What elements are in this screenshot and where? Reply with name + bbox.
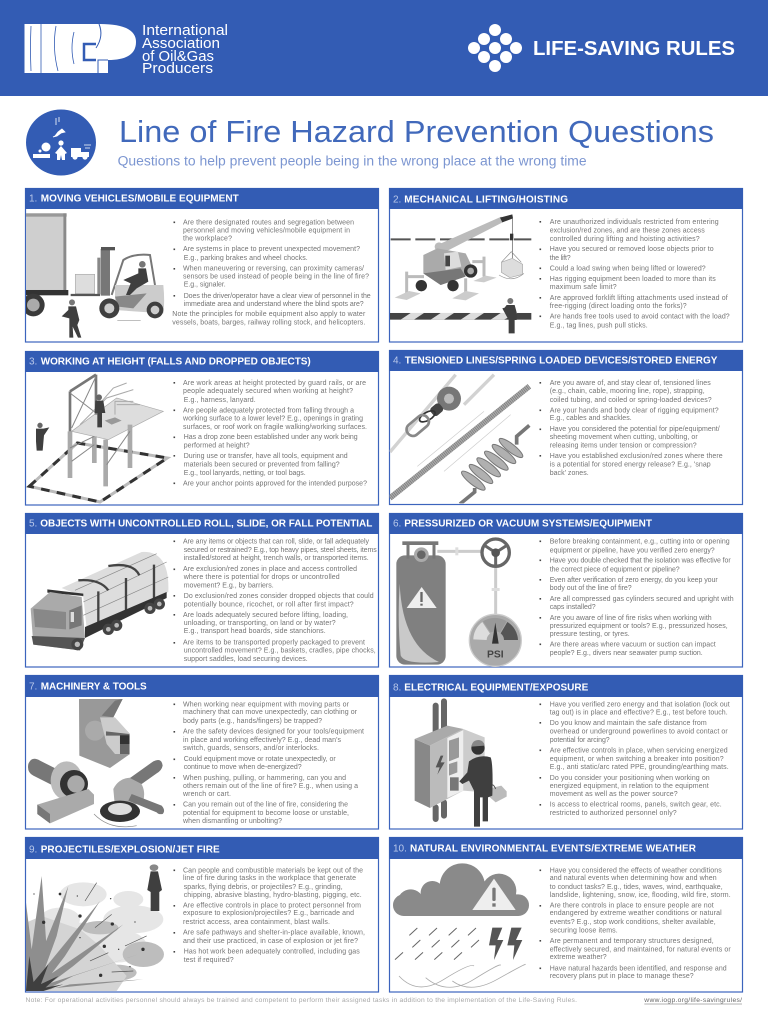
text 5: Do exclusion/red zones consider dropped objects that could: [184, 593, 374, 600]
heading 6: PRESSURIZED OR VACUUM SYSTEMS/EQUIPMENT: [404, 519, 652, 530]
text 3: Are work areas at height protected by guard rails, or are: [183, 380, 366, 387]
text 4: [540, 380, 723, 477]
text 6: [540, 538, 734, 657]
heading 7: 7.: [29, 682, 37, 693]
text 5: [174, 538, 377, 663]
panel 5: objects with uncontrolled roll: [25, 513, 379, 667]
text 8: Is access to electrical rooms, panels, switch gear, etc.: [550, 802, 722, 808]
text 2: Are approved forklift lifting attachments used instead of: [550, 295, 728, 302]
icon: life-saving rules dots: [468, 24, 522, 72]
text 7: machinery that can move unexpectedly, can clothing or: [183, 709, 358, 716]
text 4: (e.g., chain, cable, mooring line, rope), strapping,: [550, 388, 705, 395]
text 2: E.g., tag lines, push pull sticks.: [550, 322, 648, 330]
panel 7: machinery and tools: [25, 675, 379, 829]
text 5: Are exclusion/red zones in place and access controlled: [183, 566, 357, 573]
text 5: E.g., transport head boards, side stanchions.: [184, 628, 326, 635]
illustration: scaffold platform: [29, 375, 167, 502]
text 1: [172, 220, 371, 326]
text 2: controlled during lifting and hoisting activities?: [550, 236, 700, 243]
text 10: recovery plans put in place to manage these?: [550, 973, 694, 980]
text 1: When maneuvering or reversing, can proximity cameras/: [183, 266, 364, 272]
text 9: and their use practiced, in case of explosion or jet fire?: [183, 938, 358, 945]
heading 3: 3.: [29, 357, 37, 368]
text 1: Does the driver/operator have a clear view of personnel in the: [184, 293, 371, 300]
text 8: energized equipment, in relation to the equipment: [550, 783, 709, 790]
text 3: materials been secured or prevented from falling?: [184, 462, 340, 468]
text 3: [174, 380, 367, 488]
text 9: Can people and combustible materials be kept out of the: [183, 868, 363, 874]
text 7: wrench or cart.: [182, 791, 231, 798]
text 4: is a potential for stored energy release? E.g., 'snap: [550, 462, 711, 468]
logo: IOGP mark: [24, 24, 136, 73]
text 2: Are unauthorized individuals restricted from entering: [550, 219, 719, 226]
text 9: restrict access, area containment, blast walls.: [183, 919, 330, 926]
heading 2: 2.: [393, 195, 401, 206]
text 9: test if required?: [184, 957, 234, 964]
text 6: Even after verification of zero energy, do you keep your: [550, 577, 718, 584]
text 1: Note the principles for mobile equipment also apply to water: [172, 311, 366, 318]
text 3: performed at height?: [184, 442, 250, 450]
text 10: extreme weather?: [550, 954, 607, 961]
text 7: body parts (e.g., hands/fingers) be trapped?: [183, 718, 322, 725]
text 6: pressurized equipment or tools? E.g., pressurized hoses,: [550, 623, 728, 630]
text 5: Are any items or objects that can roll, slide, or fall adequately: [183, 538, 370, 546]
text 8: equipment, or when switching a breaker into position?: [550, 756, 724, 763]
text 7: [174, 702, 364, 825]
header band: [0, 0, 768, 96]
text 6: pressure testing, or tyres.: [550, 631, 630, 638]
panel 8: electrical equipment: [389, 675, 743, 829]
text 4: Are you aware of, and stay clear of, tensioned lines: [550, 380, 711, 387]
illustration: gas cylinder, valve, gauge: PSI: [487, 649, 504, 660]
text 7: Can you remain out of the line of fire, considering the: [183, 802, 348, 808]
illustration: log truck: [31, 552, 168, 650]
panel 2: mechanical lifting: [389, 188, 743, 342]
heading 4: 4.: [393, 356, 401, 367]
organisation name: [142, 22, 228, 77]
panel 3: working at height: [25, 351, 379, 505]
text 8: movement as well as the power source?: [550, 791, 678, 798]
text 9: line of fire during tasks in the workplace that generate: [183, 875, 356, 882]
text 1: E.g., signaler.: [184, 282, 226, 288]
heading 7: MACHINERY & TOOLS: [41, 682, 147, 693]
text 2: Has rigging equipment been loaded to more than its: [550, 276, 716, 283]
text 6: people? E.g., divers near seawater pump suction.: [550, 650, 703, 657]
text 2: [540, 219, 730, 330]
text 3: E.g., harness, lanyard.: [184, 397, 256, 404]
text 10: effectively secured, and maintained, for natural events or: [550, 946, 731, 954]
text 1: E.g., parking brakes and wheel chocks.: [184, 255, 308, 262]
text 8: Do you know and maintain the safe distance from: [550, 720, 707, 727]
illustration: crane: [390, 214, 531, 333]
text 10: Are there controls in place to ensure people are not: [550, 902, 714, 910]
text 7: potential for equipment to become loose or unstable,: [183, 810, 349, 817]
text 9: exposure to explosion/projectiles? E.g., barricade and: [183, 910, 354, 917]
text 6: equipment or pipeline, have you verified zero energy?: [550, 548, 715, 554]
text 2: free-rigging (direct loading onto the forks)?: [550, 303, 687, 310]
text 10: landslide, lightening, snow, ice, flooding, wild fire, storm.: [550, 892, 731, 899]
text 8: potential for arcing?: [550, 737, 610, 744]
heading 2: MECHANICAL LIFTING/HOISTING: [404, 195, 568, 206]
heading 1: 1.: [29, 194, 37, 205]
text 10: [540, 868, 731, 980]
heading 10: NATURAL ENVIRONMENTAL EVENTS/EXTREME WEATHER: [410, 844, 697, 855]
text 9: [174, 868, 365, 964]
heading 5: OBJECTS WITH UNCONTROLLED ROLL, SLIDE, OR FALL POTENTIAL: [40, 519, 372, 530]
text 9: Are safe pathways and shelter-in-place available, known,: [183, 930, 365, 936]
panel 6: pressurized systems: [389, 513, 743, 667]
text 10: endangered by extreme weather conditions or natural: [550, 910, 722, 917]
text 5: Are loads adequately secured before lifting, loading,: [183, 612, 348, 619]
text 2: exclusion/red zones, and are these zones access: [550, 228, 705, 234]
text 3: surfaces, or roof work on fragile walking/working surfaces.: [183, 424, 367, 431]
text 10: to conduct tasks? E.g., tides, waves, wind, earthquake,: [550, 884, 723, 891]
text 7: Are the safety devices designed for your tools/equipment: [183, 728, 364, 736]
text 10: Are permanent and temporary structures designed,: [550, 938, 714, 945]
text 3: Has a drop zone been established under any work being: [184, 434, 358, 441]
text 4: Have you considered the potential for pipe/equipment/: [550, 426, 720, 433]
text 9: sparks, flying debris, or projectiles? E.g., grinding,: [184, 884, 343, 891]
text 2: Are hands free tools used to avoid contact with the load?: [550, 314, 730, 320]
text 9: Has hot work been adequately controlled, including gas: [184, 948, 360, 956]
text 3: E.g., tool lanyards, netting, or tool bags.: [184, 470, 306, 477]
text 1: immediate area and understand where the blind spots are?: [184, 301, 364, 308]
illustration: machine, gear, grinder: [28, 699, 164, 827]
text 3: During use or transfer, have all tools, equipment and: [184, 453, 348, 460]
text 7: Could equipment move or rotate unexpectedly, or: [184, 756, 336, 763]
footer url: www.iogp.org/life-savingrules/: [643, 997, 742, 1004]
text 6: Are there areas where vacuum or suction can impact: [550, 642, 716, 648]
text 7: When pushing, pulling, or hammering, can you and: [183, 775, 346, 782]
heading 4: TENSIONED LINES/SPRING LOADED DEVICES/STORED ENERGY: [405, 356, 718, 367]
heading 6: 6.: [393, 519, 401, 530]
text 5: secured or restrained? E.g., top heavy pipes, steel sheets, items: [184, 547, 377, 554]
icon: line of fire circle: [26, 110, 96, 176]
text 7: When working near equipment with moving parts or: [183, 702, 350, 708]
text 8: restricted to authorized personnel only?: [550, 810, 677, 817]
text 5: installed/stored at height, trench walls, or transported items.: [184, 555, 369, 562]
text 1: vessels, boats, barges, railway rolling stock, and helicopters.: [172, 320, 365, 326]
text 7: in place and working effectively? E.g., dead man's: [183, 737, 342, 744]
heading 9: PROJECTILES/EXPLOSION/JET FIRE: [41, 845, 220, 856]
illustration: explosion: [26, 864, 164, 991]
text 4: releasing items under tension or compression?: [550, 442, 697, 450]
text 2: Could a load swing when being lifted or lowered?: [550, 266, 706, 272]
text 8: Do you consider your positioning when working on: [550, 775, 710, 782]
text 6: Have you double checked that the isolation was effective for: [550, 558, 731, 564]
text 6: Are all compressed gas cylinders secured and upright with: [550, 596, 734, 603]
text 5: uncontrolled movement? E.g., baskets, cradles, pipe chocks,: [184, 648, 376, 654]
text 6: body out of the line of fire?: [550, 585, 632, 592]
text 4: Are your hands and body clear of rigging equipment?: [550, 408, 719, 414]
subtitle: Questions to help prevent people being in the wrong place at the wrong time: [118, 154, 587, 169]
panel 1: moving vehicles: [20, 188, 379, 342]
text 7: others remain out of the line of fire? E.g., when using a: [183, 783, 358, 790]
heading 9: 9.: [29, 845, 37, 856]
text 8: tag out) is in place and effective? E.g., test before touch.: [550, 710, 728, 716]
text 5: potentially bounce, ricochet, or roll after first impact?: [184, 602, 354, 608]
heading 8: ELECTRICAL EQUIPMENT/EXPOSURE: [404, 683, 589, 694]
text 5: movement? E.g., by barriers.: [184, 582, 274, 590]
organisation name: Association: [142, 35, 220, 52]
illustration: storm cloud: [393, 863, 529, 987]
text 10: Have you considered the effects of weather conditions: [550, 868, 722, 874]
text 10: events? E.g., stop work conditions, shelter available,: [550, 919, 716, 926]
panel 9: projectiles: [25, 837, 379, 992]
text 8: E.g., anti static/arc rated PPE, grounding/earthing mats.: [550, 764, 729, 771]
title: Line of Fire Hazard Prevention Questions: [119, 114, 714, 149]
text 7: when dismantling or unbolting?: [182, 818, 282, 825]
text 6: Are you aware of line of fire risks when working with: [550, 615, 712, 622]
text 8: Have you verified zero energy and that isolation (lock out: [550, 702, 730, 708]
text 3: people adequately secured when working at height?: [183, 388, 353, 395]
heading 3: WORKING AT HEIGHT (FALLS AND DROPPED OBJECTS): [41, 357, 311, 368]
text 1: Are there designated routes and segregation between: [183, 220, 354, 226]
text 4: back' zones.: [550, 470, 589, 477]
text 4: E.g., cables and shackles.: [550, 415, 632, 422]
illustration: forklift and truck: [20, 213, 164, 338]
text 1: Are systems in place to prevent unexpected movement?: [183, 246, 360, 253]
text 10: securing loose items.: [550, 928, 618, 934]
text 8: Are effective controls in place, when servicing energized: [550, 748, 728, 754]
text 1: personnel and moving vehicles/mobile equipment in: [183, 228, 350, 234]
text 4: coiled tubing, and coiled or spring-loaded devices?: [550, 397, 712, 404]
illustration: pulley, cable, spring: [390, 375, 529, 504]
text 5: unloading, or transporting, on land or by water?: [184, 620, 336, 627]
organisation name: Producers: [142, 60, 213, 77]
illustration: gas cylinder, valve, gauge: [396, 539, 521, 666]
text 2: Have you secured or removed loose objects prior to: [550, 246, 714, 253]
life-saving rules label: LIFE-SAVING RULES: [533, 37, 735, 60]
illustration: electrical cabinet and worker: [415, 701, 507, 827]
text 3: Are people adequately protected from falling through a: [183, 408, 354, 414]
text 3: Are your anchor points approved for the intended purpose?: [183, 480, 367, 488]
organisation name: International: [142, 22, 228, 39]
text 1: sensors be used instead of people being in the line of fire?: [183, 274, 369, 280]
text 6: Before breaking containment, e.g., cutting into or opening: [550, 538, 730, 546]
heading 5: 5.: [29, 519, 37, 530]
text 2: the lift?: [550, 255, 571, 262]
text 2: maximum safe limit?: [550, 284, 617, 291]
text 5: support saddles, load securing devices.: [184, 656, 308, 663]
text 8: [540, 702, 730, 817]
panel 4: tensioned lines: [389, 350, 743, 504]
panel 10: natural events: [389, 837, 743, 992]
text 10: Have natural hazards been identified, and response and: [550, 966, 727, 972]
text 7: continue to move when de-energized?: [184, 764, 302, 771]
heading 1: MOVING VEHICLES/MOBILE EQUIPMENT: [41, 194, 239, 205]
organisation name: of Oil&Gas: [142, 48, 214, 65]
text 4: sheeting movement when cutting, unbolting, or: [550, 434, 698, 441]
heading 8: 8.: [393, 683, 401, 694]
text 10: and natural events when determining how and when: [550, 875, 717, 882]
text 6: caps installed?: [550, 604, 596, 611]
text 6: the correct piece of equipment or pipeline?: [550, 566, 680, 574]
text 3: working surface to a lower level? E.g., openings in grating: [182, 416, 363, 422]
footer note: Note: For operational activities personnel should always be trained and competent to perform their assigned tasks in addition to the implementation of the Life-Saving Rules.: [26, 997, 577, 1004]
text 8: overhead or underground powerlines to avoid contact or: [550, 728, 728, 736]
text 5: Are items to be transported properly packaged to prevent: [183, 640, 365, 646]
text 7: switch, guards, sensors, and/or interlocks.: [183, 745, 319, 752]
text 9: chipping, abrasive blasting, hydro-blasting, pigging, etc.: [184, 892, 362, 899]
text 1: the workplace?: [183, 236, 232, 242]
text 5: where there is potential for drops or uncontrolled: [183, 574, 340, 581]
heading 10: 10.: [393, 844, 407, 855]
text 4: Have you established exclusion/red zones where there: [550, 453, 723, 460]
text 9: Are effective controls in place to protect personnel from: [183, 902, 361, 910]
